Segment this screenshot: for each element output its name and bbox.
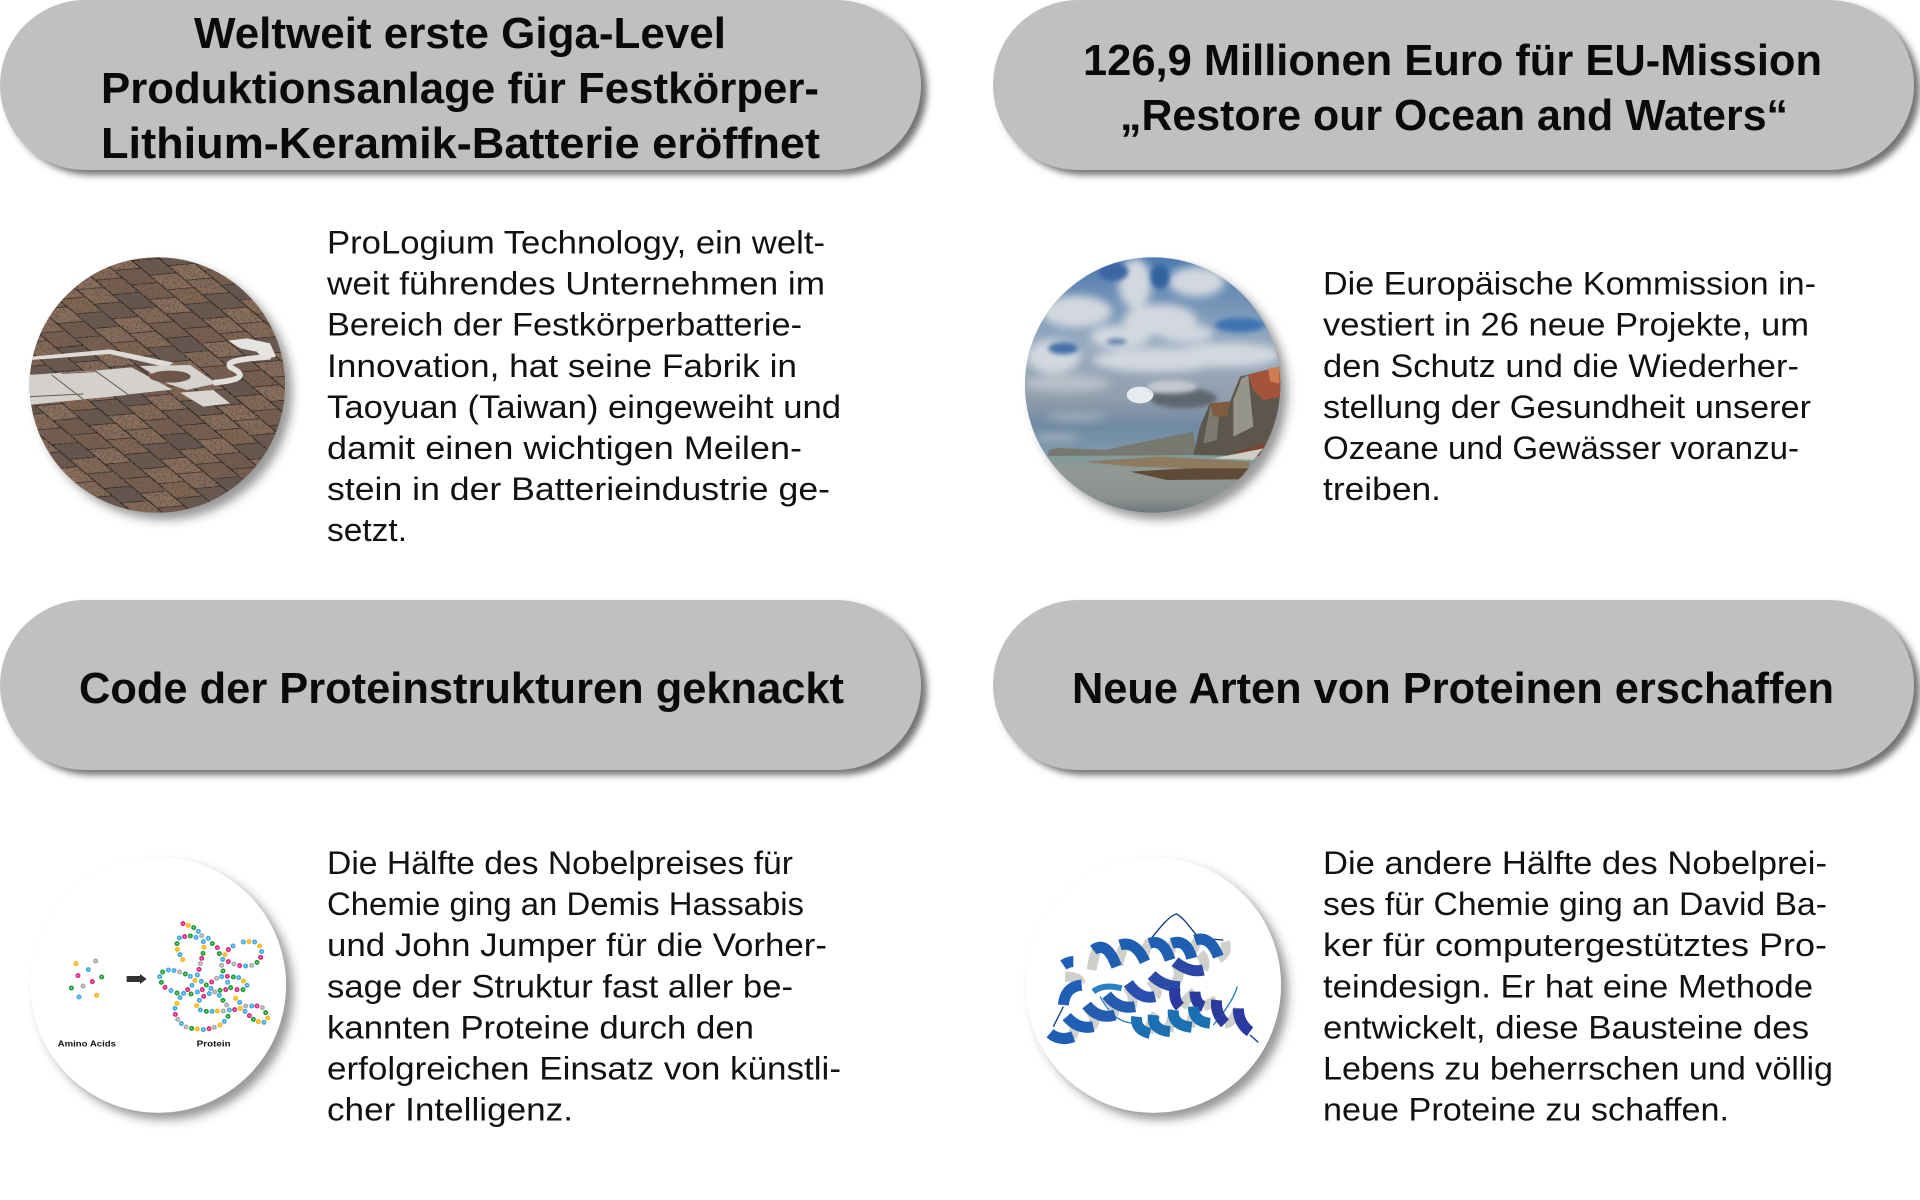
text block: protein structure code: Chemie ging an Demis Hassabis bbox=[327, 886, 804, 922]
text block: battery factory: Taoyuan (Taiwan) eingeweiht und bbox=[327, 389, 841, 425]
label: amino acids: Amino Acids bbox=[58, 1038, 116, 1048]
text block: protein structure code: erfolgreichen Einsatz von künstli- bbox=[327, 1050, 841, 1086]
panel: battery factory bbox=[0, 0, 921, 548]
arrow bbox=[127, 974, 147, 984]
text block: battery factory: setzt. bbox=[327, 512, 407, 548]
panel: EU ocean mission bbox=[993, 0, 1914, 518]
panel: new proteins bbox=[993, 600, 1914, 1128]
text block: new proteins: entwickelt, diese Bausteine des bbox=[1323, 1009, 1809, 1045]
text block: battery factory: ProLogium Technology, ein welt- bbox=[327, 224, 825, 260]
text block: new proteins: neue Proteine zu schaffen. bbox=[1323, 1092, 1729, 1128]
text block: new proteins: ker für computergestütztes Pro- bbox=[1323, 927, 1827, 963]
heading pill: battery factory: Weltweit erste Giga-Level bbox=[194, 9, 726, 58]
text block: protein structure code: kannten Proteine durch den bbox=[327, 1009, 754, 1045]
text block: protein structure code: sage der Struktur fast aller be- bbox=[327, 968, 793, 1004]
text block: new proteins: Lebens zu beherrschen und völlig bbox=[1323, 1050, 1833, 1086]
heading pill: battery factory bbox=[0, 0, 921, 170]
text block: protein structure code: Die Hälfte des Nobelpreises für bbox=[327, 845, 793, 881]
text block: battery factory bbox=[326, 224, 841, 548]
text block: EU ocean mission: Ozeane und Gewässer voranzu- bbox=[1323, 430, 1799, 466]
label: protein: Protein bbox=[197, 1038, 231, 1048]
amino acid and protein dots bbox=[71, 924, 268, 1030]
heading pill: battery factory: Produktionsanlage für Festkörper- bbox=[101, 64, 819, 113]
text block: EU ocean mission bbox=[1323, 266, 1816, 507]
text block: new proteins bbox=[1323, 845, 1833, 1128]
text block: battery factory: Innovation, hat seine Fabrik in bbox=[327, 348, 797, 384]
heading pill: new proteins bbox=[993, 600, 1914, 770]
heading pill: EU ocean mission: „Restore our Ocean and Waters“ bbox=[1120, 91, 1788, 140]
protein ribbons bbox=[1050, 914, 1258, 1042]
image: protein ribbon model bbox=[1026, 857, 1281, 1113]
heading pill: EU ocean mission bbox=[993, 0, 1914, 170]
text block: new proteins: Die andere Hälfte des Nobelprei- bbox=[1323, 845, 1827, 881]
heading pill: battery factory: Lithium-Keramik-Batterie eröffnet bbox=[101, 119, 820, 168]
text block: EU ocean mission: den Schutz und die Wiederher- bbox=[1323, 348, 1799, 384]
text block: battery factory: stein in der Batterieindustrie ge- bbox=[327, 471, 830, 507]
heading pill: EU ocean mission: 126,9 Millionen Euro für EU-Mission bbox=[1083, 36, 1822, 85]
heading pill: protein structure code: Code der Proteinstrukturen geknackt bbox=[79, 664, 844, 713]
text block: protein structure code: cher Intelligenz. bbox=[327, 1092, 573, 1128]
text block: battery factory: weit führendes Unternehmen im bbox=[326, 266, 825, 302]
text block: new proteins: ses für Chemie ging an David Ba- bbox=[1323, 886, 1827, 922]
image: coastal cliffs under cloudy sky bbox=[1023, 257, 1283, 518]
heading pill: protein structure code bbox=[0, 600, 921, 770]
text block: protein structure code bbox=[327, 845, 841, 1128]
text block: battery factory: damit einen wichtigen Meilen- bbox=[327, 430, 802, 466]
text block: EU ocean mission: treiben. bbox=[1323, 471, 1441, 507]
text block: EU ocean mission: Die Europäische Kommission in- bbox=[1323, 266, 1816, 302]
panel: protein structure code bbox=[0, 600, 921, 1128]
text block: EU ocean mission: vestiert in 26 neue Projekte, um bbox=[1323, 307, 1809, 343]
image: paved charging bay bbox=[27, 253, 290, 517]
text block: new proteins: teindesign. Er hat eine Methode bbox=[1323, 968, 1813, 1004]
text block: battery factory: Bereich der Festkörperbatterie- bbox=[327, 307, 802, 343]
text block: protein structure code: und John Jumper für die Vorher- bbox=[327, 927, 827, 963]
image: amino acids folding into protein bbox=[31, 857, 286, 1113]
text block: EU ocean mission: stellung der Gesundheit unserer bbox=[1323, 389, 1811, 425]
heading pill: new proteins: Neue Arten von Proteinen erschaffen bbox=[1072, 664, 1834, 713]
